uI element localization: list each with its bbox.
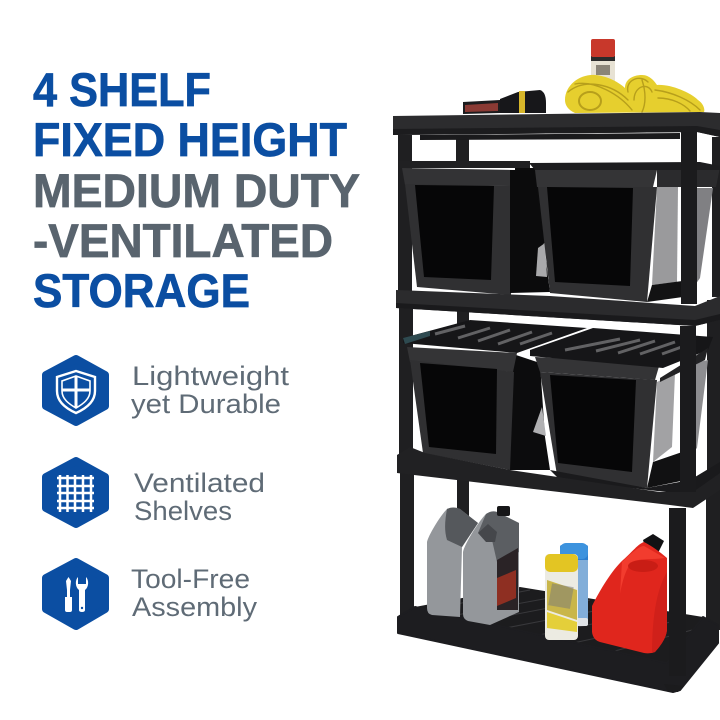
text: ventilated shelves (134, 468, 265, 526)
red fuel can (592, 534, 667, 653)
oil jug right (463, 506, 519, 625)
title: -VENTILATED (33, 214, 333, 267)
feature: lightweight yet durable (46, 359, 290, 422)
upper right bin (529, 162, 720, 302)
lower right bin (530, 328, 713, 488)
top shelf (393, 112, 720, 140)
text: ventilated shelves: Shelves (134, 496, 232, 526)
rope (565, 75, 704, 113)
bottom shelf (398, 587, 718, 692)
upper left bin (398, 161, 550, 295)
feature: ventilated shelves (46, 461, 265, 526)
third shelf (397, 447, 720, 508)
spray can (591, 39, 615, 83)
feature: tool-free assembly (46, 562, 258, 626)
text: tool-free assembly: Assembly (132, 592, 258, 622)
oil jug left (427, 508, 478, 617)
second shelf (396, 290, 720, 326)
title: MEDIUM DUTY (33, 164, 360, 217)
title (33, 63, 360, 317)
title: FIXED HEIGHT (33, 113, 347, 166)
text: lightweight yet durable: Lightweight (132, 361, 290, 391)
text: lightweight yet durable: yet Durable (131, 389, 281, 419)
text: tool-free assembly (131, 564, 258, 622)
text: ventilated shelves: Ventilated (134, 468, 265, 498)
icon: tools (46, 562, 105, 626)
icon: shield (46, 359, 105, 422)
text: tool-free assembly: Tool-Free (131, 564, 250, 594)
flashlight (463, 90, 546, 114)
text: lightweight yet durable (131, 361, 290, 419)
yellow bottle (545, 554, 578, 640)
title: 4 SHELF (33, 63, 211, 116)
blue bottle (560, 543, 588, 626)
title: STORAGE (33, 264, 250, 317)
back and left posts (398, 135, 720, 630)
icon: grid (46, 461, 105, 524)
front right posts (664, 132, 697, 692)
product photo: shelving unit (393, 39, 720, 692)
lower left bin (403, 320, 587, 470)
